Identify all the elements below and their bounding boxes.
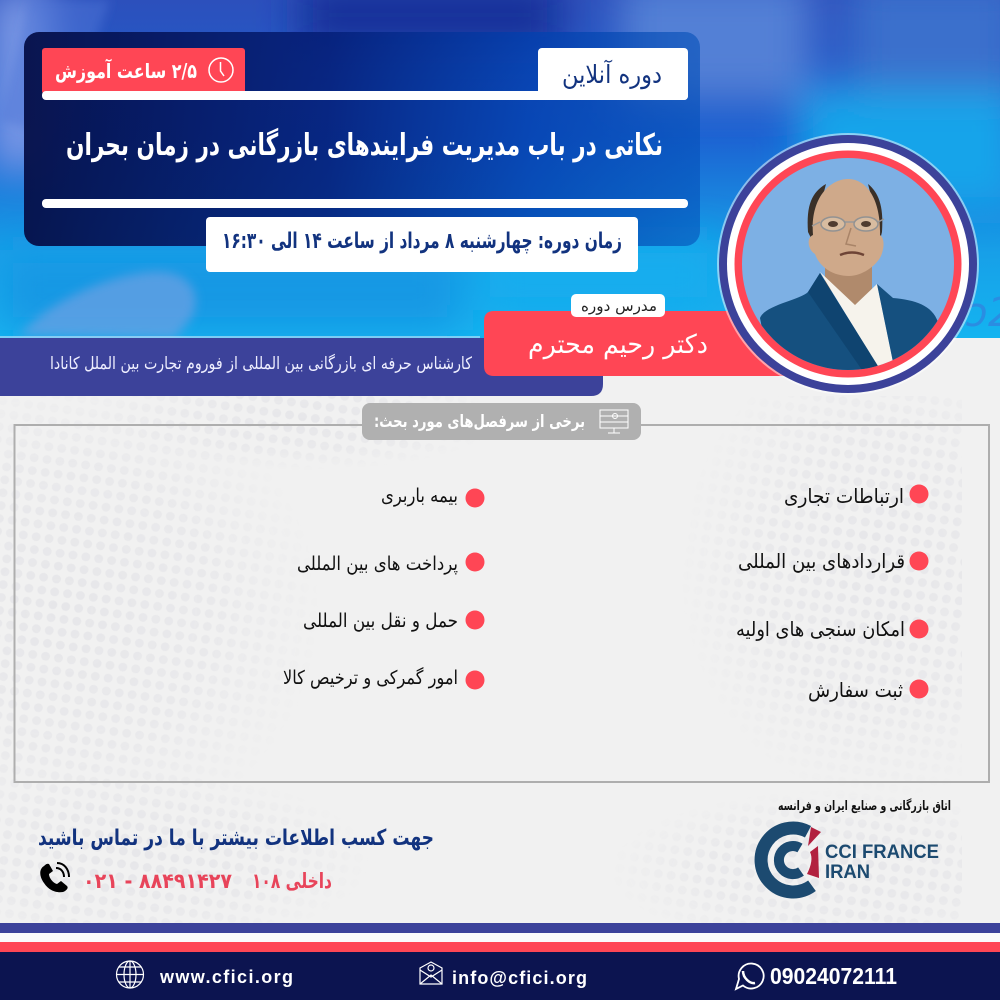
topic item: حمل و نقل بین المللی	[303, 610, 458, 632]
icon: phone handset	[40, 863, 69, 892]
logo: chamber of commerce	[761, 798, 951, 892]
icon: whatsapp	[736, 964, 764, 989]
email: info@cfici.org	[452, 968, 587, 988]
rule: upper	[42, 91, 688, 100]
topic item: پرداخت های بین المللی	[297, 553, 458, 575]
logo mark	[761, 827, 821, 892]
whatsapp number: 09024072111	[770, 963, 897, 989]
course date box	[206, 217, 638, 272]
instructor tag text: مدرس دوره	[581, 297, 657, 315]
topic item: ثبت سفارش	[808, 678, 903, 702]
panel: topics frame	[14, 425, 989, 782]
topic list: right column	[736, 484, 928, 702]
phone numbers	[83, 869, 332, 893]
topic item: امکان سنجی های اولیه	[736, 617, 905, 641]
red bar: instructor name	[484, 311, 790, 376]
icon: globe	[116, 961, 144, 988]
online course text: دوره آنلاین	[562, 59, 662, 90]
topic item: ارتباطات تجاری	[784, 484, 904, 508]
course date text: زمان دوره: چهارشنبه ۸ مرداد از ساعت ۱۴ الی ۱۶:۳۰	[222, 229, 622, 254]
tricolour stripes	[0, 923, 1000, 952]
instructor tag	[571, 294, 665, 317]
instructor portrait	[717, 133, 979, 395]
icon: presentation monitor	[600, 410, 628, 433]
contact heading: جهت کسب اطلاعات بیشتر با ما در تماس باشید	[38, 826, 434, 851]
badge: duration	[42, 48, 245, 94]
logo wordmark: CCI FRANCE	[825, 842, 939, 863]
panel: course title backdrop	[24, 32, 700, 246]
logo wordmark second line: IRAN	[825, 862, 870, 883]
topics heading tag	[362, 403, 641, 440]
icon: clock	[209, 58, 233, 82]
website: www.cfici.org	[159, 967, 293, 987]
phone number: ۰۲۱ - ۸۸۴۹۱۴۲۷	[83, 869, 232, 893]
duration text: ۲/۵ ساعت آموزش	[55, 58, 197, 83]
bio text: کارشناس حرفه ای بازرگانی بین المللی از فوروم تجارت بین الملل کانادا	[50, 353, 473, 374]
hero photo background	[0, 0, 1000, 338]
phone extension: داخلی ۱۰۸	[252, 869, 332, 893]
purple bar: instructor bio	[0, 338, 603, 396]
topic list: left column	[283, 485, 484, 690]
icon: envelope	[420, 962, 442, 984]
rule: lower	[42, 199, 688, 208]
topic item: قراردادهای بین المللی	[738, 549, 905, 573]
instructor name: دکتر رحیم محترم	[528, 330, 708, 360]
halftone dot texture	[0, 396, 962, 924]
topic item: امور گمرکی و ترخیص کالا	[283, 666, 458, 689]
topic item: بیمه باربری	[381, 485, 458, 507]
topics heading text: برخی از سرفصل‌های مورد بحث:	[374, 412, 585, 432]
course title: نکاتی در باب مدیریت فرایندهای بازرگانی در زمان بحران	[66, 127, 663, 163]
badge: online course	[538, 48, 688, 100]
footer bar	[0, 952, 1000, 1000]
